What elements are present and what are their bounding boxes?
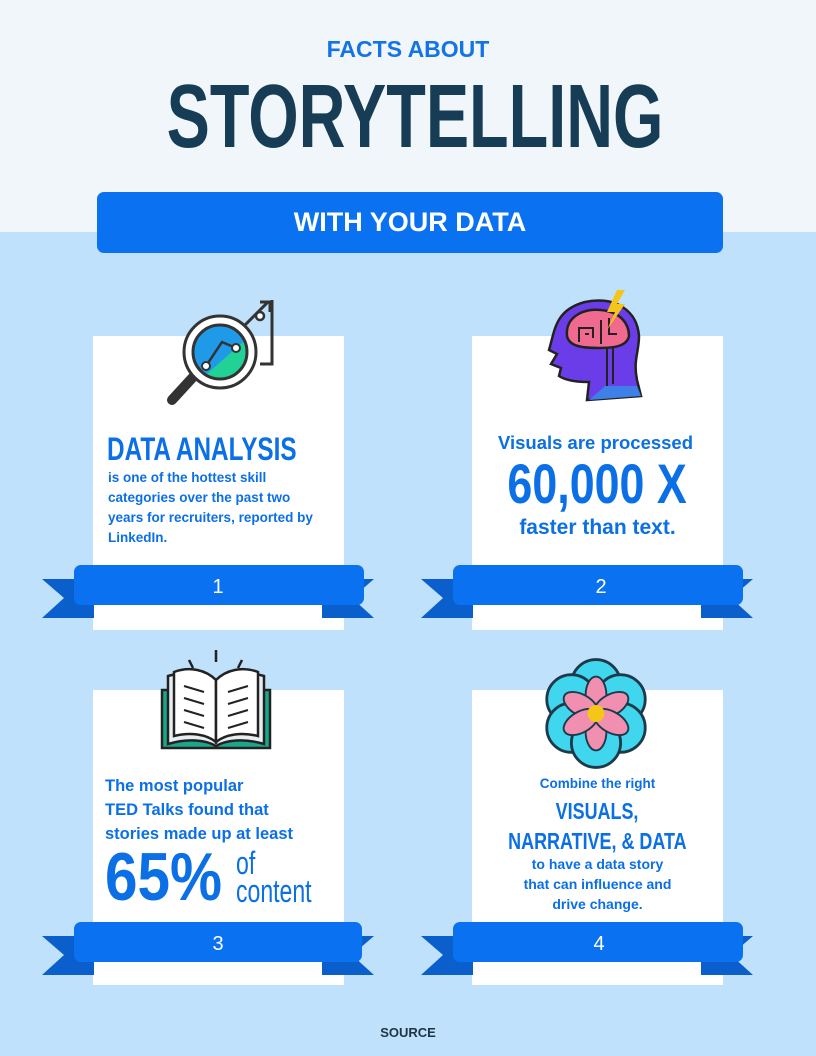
ribbon 4 bbox=[421, 922, 753, 975]
heading: data analysis: DATA ANALYSIS bbox=[107, 431, 297, 467]
text: data story: that can influence and bbox=[524, 876, 671, 892]
footer: source: SOURCE bbox=[380, 1025, 436, 1040]
icon: magnifier chart bbox=[167, 300, 274, 405]
ribbon 2: 2 bbox=[595, 576, 607, 598]
heading: visuals narrative data: VISUALS, bbox=[556, 798, 639, 824]
banner: with your data bbox=[97, 192, 723, 253]
stat: 60,000 X: 60,000 X bbox=[508, 452, 687, 515]
text: combine the right: Combine the right bbox=[540, 776, 655, 791]
text: TED talks: stories made up at least bbox=[105, 825, 293, 843]
heading: visuals narrative data: NARRATIVE, & DATA bbox=[508, 828, 687, 854]
heading: visuals narrative data bbox=[508, 798, 687, 854]
text: TED talks bbox=[105, 777, 293, 843]
text: data analysis: is one of the hottest skill categories over the past two years for recruiters, reported by LinkedIn. bbox=[108, 470, 313, 545]
icon: flower of life bbox=[545, 658, 647, 769]
ribbon 2 bbox=[421, 565, 753, 618]
heading: facts about: FACTS ABOUT bbox=[327, 36, 489, 62]
panel 2: visuals processed bbox=[472, 336, 723, 630]
stat: 65% of content: 65% bbox=[105, 839, 222, 915]
header background bbox=[0, 0, 816, 232]
ribbon 1: 1 bbox=[212, 576, 224, 598]
text: data story bbox=[524, 856, 671, 912]
stat: 65% of content: content bbox=[236, 873, 312, 909]
ribbon 3: 3 bbox=[212, 933, 224, 955]
stat: 65% of content: of bbox=[236, 845, 255, 881]
text: data story: drive change. bbox=[552, 896, 643, 912]
ribbon 3 bbox=[42, 922, 374, 975]
ribbon 1 bbox=[42, 565, 374, 618]
text: visuals are processed: Visuals are processed bbox=[498, 432, 693, 453]
icon: head brain bbox=[548, 290, 642, 402]
ribbon 4: 4 bbox=[593, 933, 605, 955]
panel 1: data analysis bbox=[93, 336, 344, 630]
text: TED talks: The most popular bbox=[105, 777, 243, 795]
text: faster than text: faster than text. bbox=[519, 516, 676, 539]
title: storytelling: STORYTELLING bbox=[167, 67, 663, 167]
text: data story: to have a data story bbox=[532, 856, 663, 872]
panel 3: TED talks bbox=[93, 690, 344, 985]
text: TED talks: TED Talks found that bbox=[105, 801, 269, 819]
banner: with your data: WITH YOUR DATA bbox=[294, 207, 526, 237]
stat: 65% of content bbox=[105, 839, 312, 915]
panel 4: combine bbox=[472, 690, 723, 985]
icon: open book bbox=[160, 650, 272, 750]
